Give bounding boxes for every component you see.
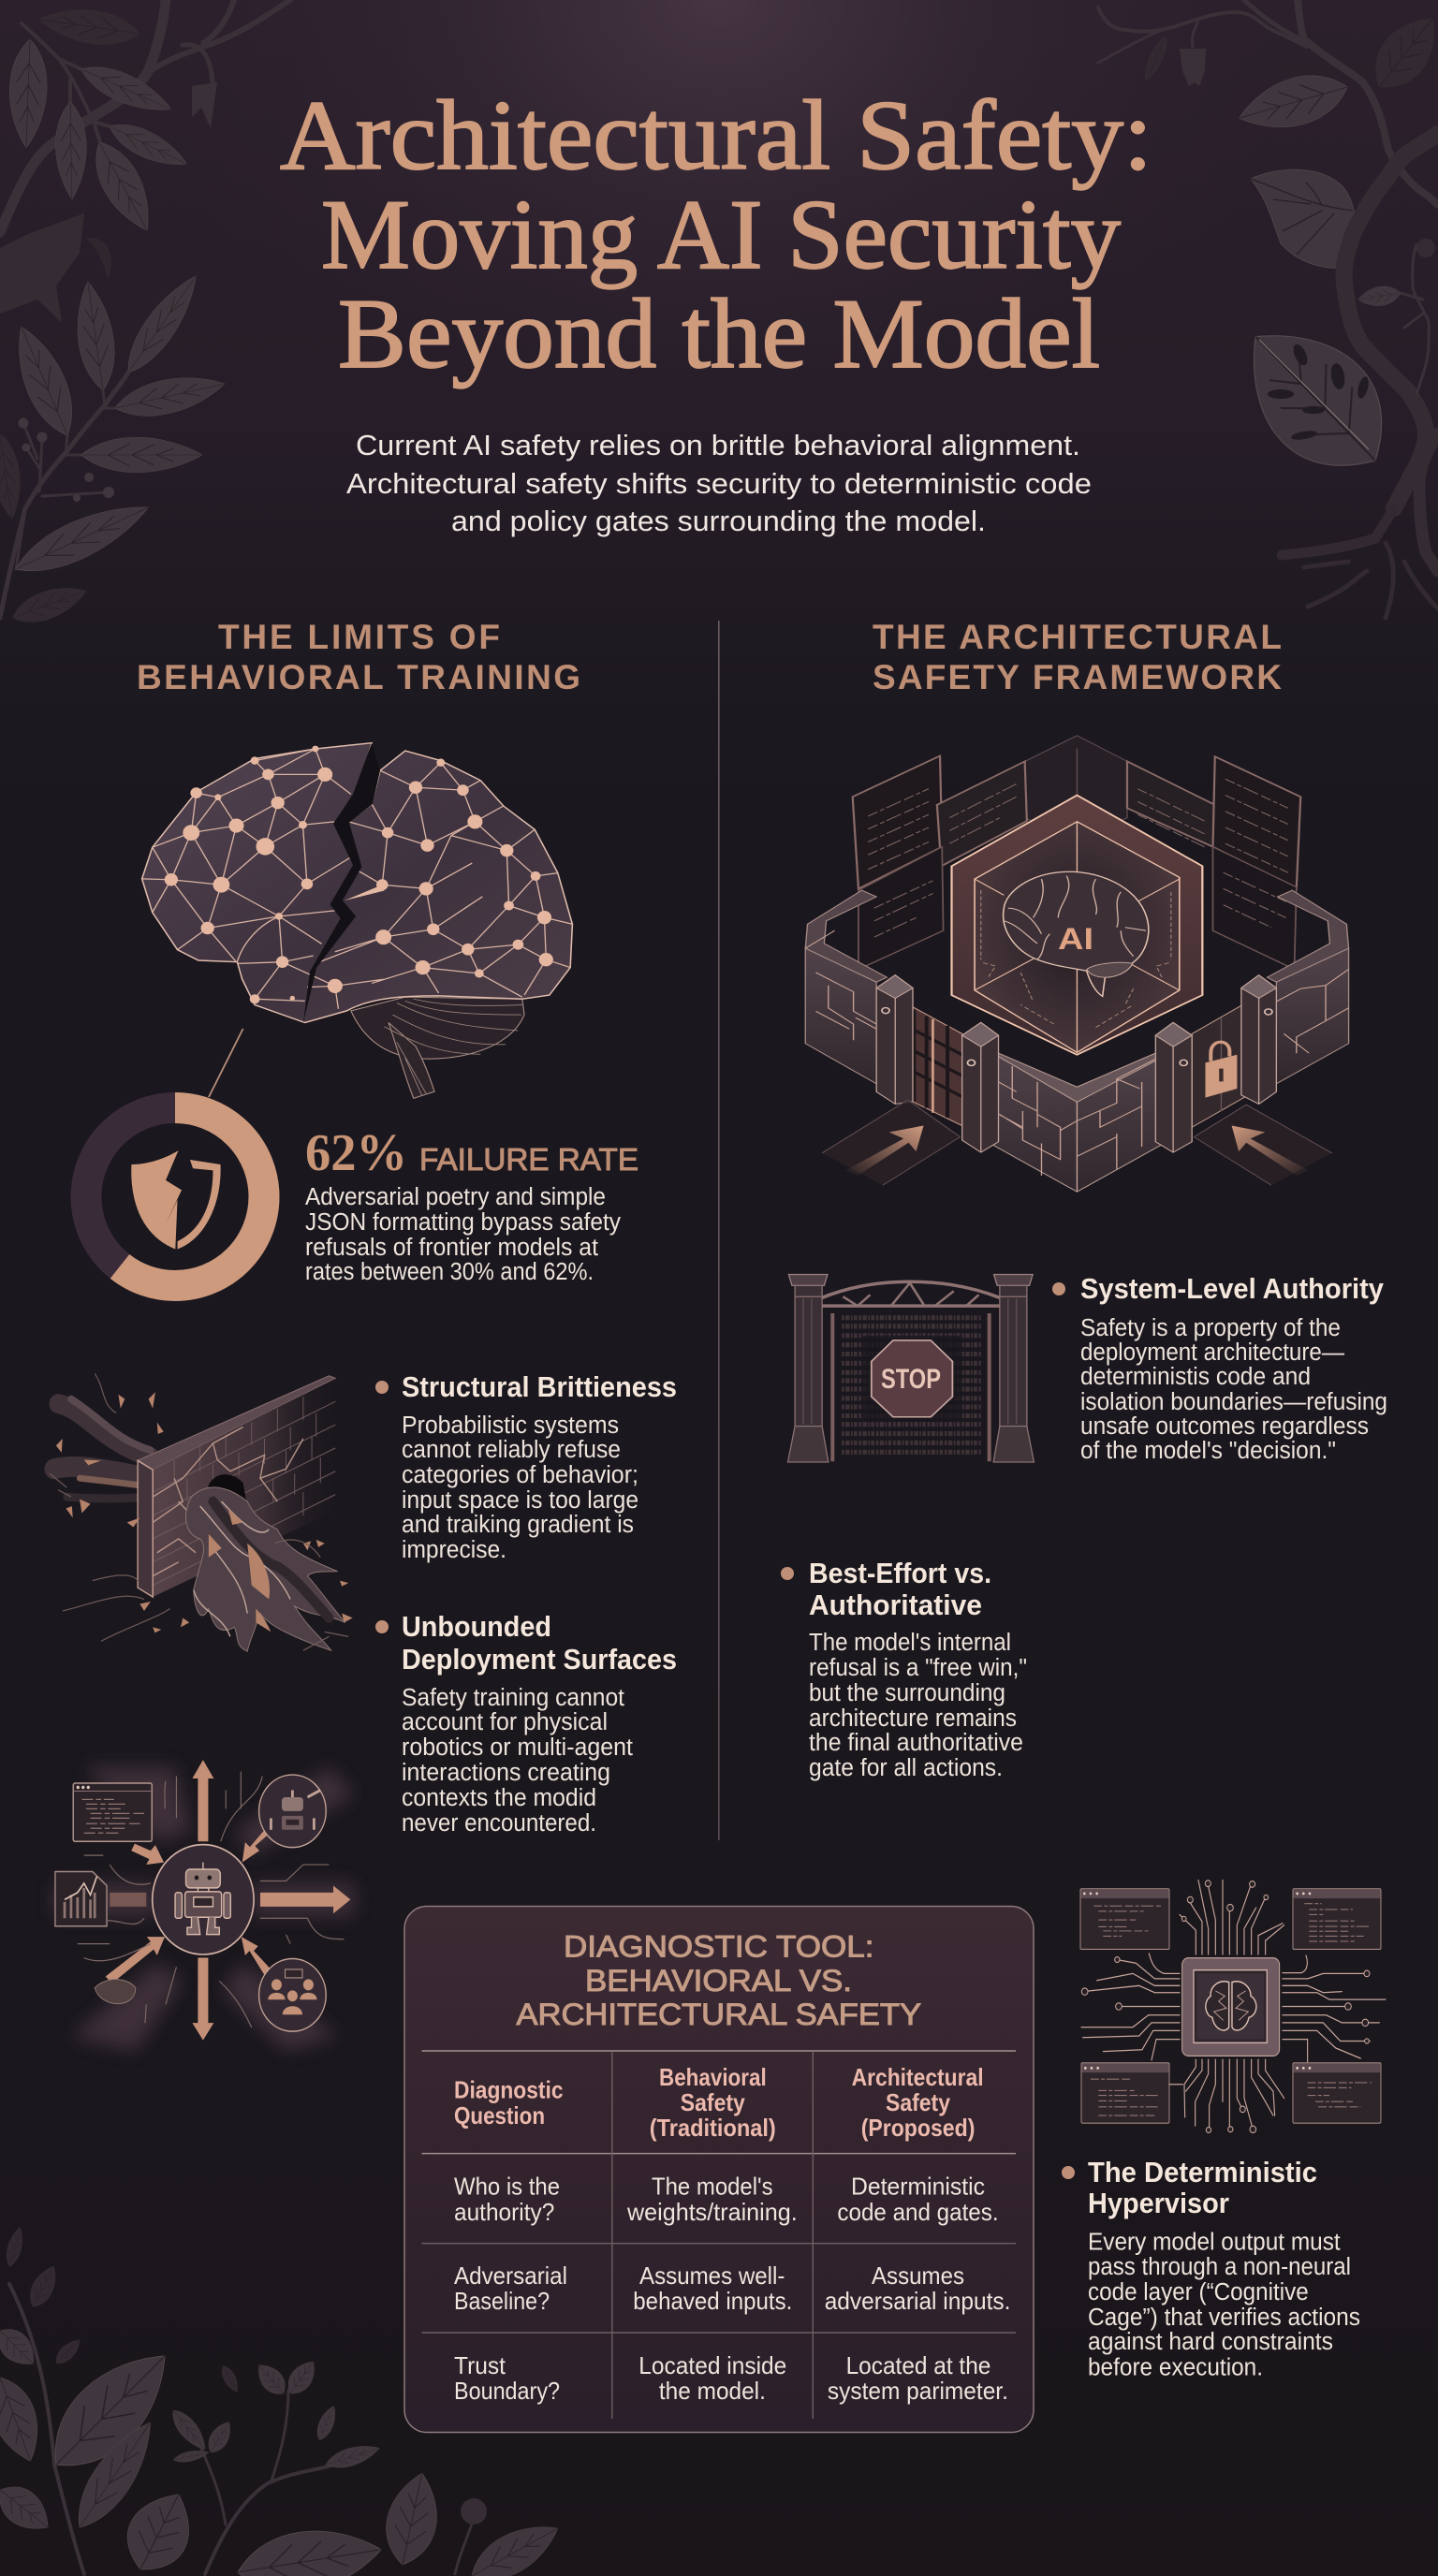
subtitle: Architectural safety shifts security to deterministic code <box>346 467 1092 500</box>
illustration: stop gate: STOP <box>881 1364 941 1395</box>
heading: the architectural safety framework <box>873 618 1282 696</box>
item: unbounded deployment surfaces: account for physical <box>402 1709 608 1735</box>
stat: 62% failure rate: refusals of frontier models at <box>305 1235 598 1261</box>
label: AI: AI <box>1058 922 1093 956</box>
table header row: Behavioral <box>659 2063 767 2091</box>
stat: 62% failure rate: Adversarial poetry and simple <box>305 1184 606 1210</box>
title: Beyond the Model <box>338 279 1100 388</box>
item: unbounded deployment surfaces: Unbounded <box>402 1610 551 1643</box>
stat: 62% failure rate: 62% <box>305 1124 407 1182</box>
heading: the limits of behavioral training: BEHAVIORAL TRAINING <box>137 658 580 696</box>
table row: adversarial baseline: adversarial inputs. <box>825 2287 1011 2315</box>
item: system-level authority: unsafe outcomes regardless <box>1080 1413 1369 1440</box>
item: unbounded deployment surfaces: robotics or multi-agent <box>402 1734 633 1761</box>
title <box>280 80 1152 388</box>
stat: 62% failure rate <box>86 1108 638 1286</box>
table row: authority: weights/training. <box>626 2198 798 2226</box>
item: best-effort vs authoritative: but the surrounding <box>809 1680 1005 1706</box>
item: the deterministic hypervisor: Every model output must <box>1088 2230 1341 2256</box>
item: structural brittleness <box>375 1370 677 1563</box>
table row: adversarial baseline: Assumes <box>872 2261 964 2290</box>
table header row: (Traditional) <box>650 2114 776 2142</box>
table row: adversarial baseline: Assumes well- <box>639 2261 785 2290</box>
table title <box>517 1930 921 2031</box>
table row: trust boundary: system parimeter. <box>828 2377 1008 2405</box>
table row: authority: The model's <box>652 2172 773 2200</box>
illustration: water bursting through wall <box>50 1373 353 1651</box>
title: Architectural Safety: <box>280 80 1152 190</box>
item: structural brittleness: categories of behavior; <box>402 1462 638 1488</box>
subtitle <box>346 429 1092 537</box>
foliage: bottom left <box>0 2225 567 2576</box>
subtitle: and policy gates surrounding the model. <box>451 505 986 537</box>
item: system-level authority: isolation boundaries—refusing <box>1080 1389 1387 1415</box>
title: Moving AI Security <box>321 180 1121 289</box>
table header row: Question <box>454 2101 545 2130</box>
item: the deterministic hypervisor: Hypervisor <box>1088 2187 1229 2219</box>
item: best-effort vs authoritative: refusal is a "free win," <box>809 1655 1027 1681</box>
illustration: hypervisor chip with code windows <box>1080 1880 1386 2133</box>
item: structural brittleness: cannot reliably refuse <box>402 1437 621 1463</box>
table row: trust boundary: the model. <box>659 2377 766 2405</box>
item: system-level authority: System-Level Authority <box>1080 1272 1385 1305</box>
table row: authority: Deterministic <box>851 2172 985 2200</box>
foliage: top right <box>1098 0 1438 618</box>
foliage: top left <box>0 0 290 631</box>
illustration: robot hub with outward arrows <box>54 1760 355 2051</box>
item: structural brittleness: input space is too large <box>402 1487 638 1514</box>
table row: adversarial baseline: Baseline? <box>454 2287 550 2315</box>
icon: cracked shield <box>131 1150 221 1250</box>
item: structural brittleness: and traiking gradient is <box>402 1512 634 1538</box>
icon: padlock <box>1205 1042 1237 1098</box>
table row: authority: authority? <box>454 2198 554 2226</box>
table title: ARCHITECTURAL SAFETY <box>517 1998 921 2031</box>
table row: authority: code and gates. <box>837 2198 999 2226</box>
table row: adversarial baseline: behaved inputs. <box>633 2287 792 2315</box>
item: best-effort vs authoritative: Authoritative <box>809 1588 982 1621</box>
item: best-effort vs authoritative: Best-Effort vs. <box>809 1557 991 1589</box>
item: system-level authority: Safety is a property of the <box>1080 1315 1341 1341</box>
table title: BEHAVIORAL VS. <box>585 1964 852 1998</box>
item: unbounded deployment surfaces <box>375 1610 677 1837</box>
item: best-effort vs authoritative: architecture remains <box>809 1705 1017 1732</box>
item: unbounded deployment surfaces: interactions creating <box>402 1760 610 1786</box>
stat: 62% failure rate: rates between 30% and 62%. <box>305 1259 594 1285</box>
item: best-effort vs authoritative <box>781 1557 1027 1781</box>
item: the deterministic hypervisor: pass through a non-neural <box>1088 2254 1351 2280</box>
item: unbounded deployment surfaces: never encountered. <box>402 1810 596 1837</box>
item: the deterministic hypervisor: code layer (“Cognitive <box>1088 2279 1309 2305</box>
item: the deterministic hypervisor: Cage”) that verifies actions <box>1088 2305 1360 2331</box>
item: system-level authority: of the model's "decision." <box>1080 1438 1336 1464</box>
table header row: Safety <box>886 2088 950 2116</box>
subtitle: Current AI safety relies on brittle behavioral alignment. <box>356 429 1080 461</box>
donut chart <box>86 1108 264 1286</box>
item: system-level authority: deployment architecture— <box>1080 1339 1344 1366</box>
table row: adversarial baseline: Adversarial <box>454 2261 567 2290</box>
item: unbounded deployment surfaces: contexts the modid <box>402 1785 596 1811</box>
item: structural brittleness: Structural Brittieness <box>402 1370 677 1403</box>
item: the deterministic hypervisor: before execution. <box>1088 2355 1263 2381</box>
item: best-effort vs authoritative: The model's internal <box>809 1630 1011 1656</box>
arrow: into left gate <box>845 1126 924 1176</box>
table title: DIAGNOSTIC TOOL: <box>564 1930 874 1964</box>
item: best-effort vs authoritative: the final authoritative <box>809 1730 1023 1756</box>
item: structural brittleness: Probabilistic systems <box>402 1412 619 1439</box>
table row: authority <box>454 2172 999 2226</box>
table row: trust boundary: Located at the <box>846 2351 990 2379</box>
table row: authority: Who is the <box>454 2172 560 2200</box>
illustration: stop gate <box>788 1275 1034 1462</box>
heading: the architectural safety framework: THE ARCHITECTURAL <box>873 618 1282 656</box>
heading: the architectural safety framework: SAFETY FRAMEWORK <box>873 658 1282 696</box>
heading: the limits of behavioral training: THE LIMITS OF <box>218 618 500 656</box>
leader line from brain to stat <box>209 1029 243 1097</box>
table row: trust boundary <box>454 2351 1008 2405</box>
table row: adversarial baseline <box>454 2261 1011 2315</box>
item: system-level authority: deterministis code and <box>1080 1364 1311 1390</box>
panel: diagnostic tool table <box>404 1906 1034 2432</box>
item: the deterministic hypervisor: against hard constraints <box>1088 2329 1333 2355</box>
item: the deterministic hypervisor <box>1062 2156 1360 2381</box>
item: unbounded deployment surfaces: Deployment Surfaces <box>402 1643 677 1676</box>
stat: 62% failure rate: JSON formatting bypass safety <box>305 1209 621 1236</box>
item: best-effort vs authoritative: gate for all actions. <box>809 1755 1003 1781</box>
table row: trust boundary: Trust <box>454 2351 506 2379</box>
table header row: Architectural <box>852 2063 984 2091</box>
heading: the limits of behavioral training <box>137 618 580 696</box>
table header row: (Proposed) <box>861 2114 975 2142</box>
AI brain <box>1004 871 1149 996</box>
arrow: into right gate <box>1232 1126 1309 1176</box>
stat: 62% failure rate: FAILURE RATE <box>419 1142 638 1177</box>
item: system-level authority <box>1052 1272 1387 1464</box>
illustration: AI cage inside wall <box>805 736 1349 1192</box>
table header row <box>454 2063 984 2142</box>
table header row: Diagnostic <box>454 2076 564 2104</box>
item: unbounded deployment surfaces: Safety training cannot <box>402 1685 624 1711</box>
item: structural brittleness: imprecise. <box>402 1537 506 1563</box>
table header row: Safety <box>681 2088 745 2116</box>
table row: trust boundary: Located inside <box>638 2351 786 2379</box>
illustration: cracked neural brain <box>142 743 572 1098</box>
table row: trust boundary: Boundary? <box>454 2377 560 2405</box>
item: the deterministic hypervisor: The Deterministic <box>1088 2156 1317 2188</box>
